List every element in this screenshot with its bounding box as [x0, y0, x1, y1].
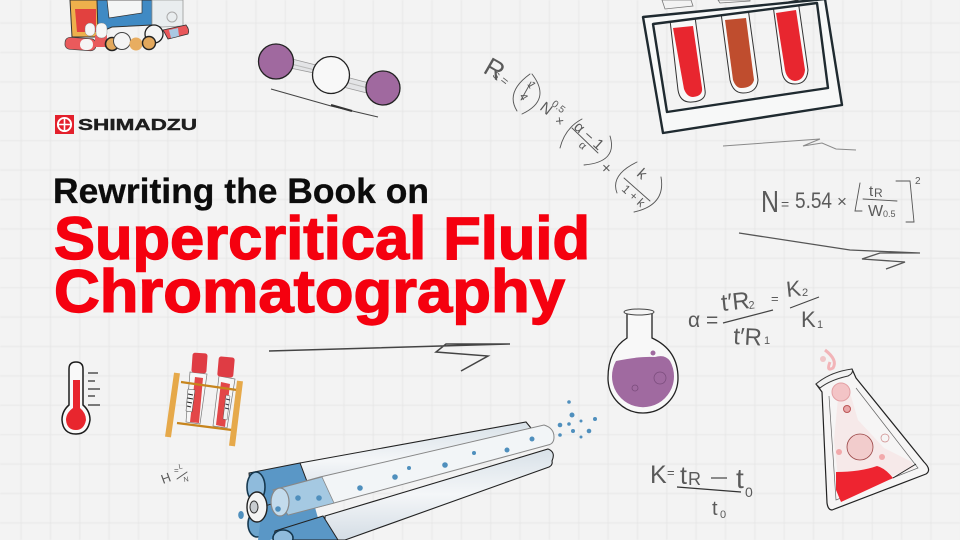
equation: H small: N	[183, 476, 189, 484]
illustration: erlenmeyer flask	[816, 350, 929, 510]
logo wordmark: SHIMADZU	[78, 117, 197, 134]
equation: N: 5.54	[795, 188, 832, 213]
liquid	[612, 356, 674, 407]
top tube	[247, 422, 531, 510]
equation: resolution Rs: k	[633, 165, 651, 183]
title line 2: Supercritical Fluid	[54, 205, 590, 272]
equation: N: W	[868, 203, 884, 220]
bottom tube	[273, 449, 553, 540]
equation: resolution Rs: 1	[524, 80, 538, 91]
illustration: blood sample tubes	[168, 353, 240, 446]
scribble: under rack	[723, 139, 856, 150]
tube 3	[773, 0, 808, 84]
lower-left tube end	[248, 511, 266, 537]
equation: alpha: K	[801, 307, 816, 332]
equation: k	[650, 461, 753, 521]
illustration: round bottom flask	[608, 309, 678, 413]
rack frame	[643, 0, 842, 133]
tube 1	[670, 17, 705, 102]
equation: resolution Rs: 0.5	[549, 99, 567, 116]
title line 1: Rewriting the Book on	[53, 172, 429, 211]
equation: H small: =	[174, 466, 179, 475]
equation: resolution Rs: 4	[516, 92, 530, 103]
illustration: thermometer	[62, 362, 100, 434]
equation: H small: H	[159, 470, 173, 487]
illustration: chromatography columns	[238, 400, 597, 540]
equation: alpha: 1	[764, 335, 770, 347]
rack frame	[168, 373, 240, 446]
tube 2	[721, 8, 758, 93]
ring end cap	[247, 492, 267, 522]
logo: Shimadzu	[55, 115, 197, 134]
equation: N: R	[874, 186, 883, 200]
equation: alpha: 1	[817, 319, 823, 331]
vapour	[825, 350, 834, 369]
liquid	[836, 466, 893, 502]
equation: N: 2	[915, 176, 921, 187]
equation: resolution Rs: α	[576, 139, 589, 153]
middle transparent tube	[271, 425, 554, 516]
tube right	[213, 356, 235, 428]
equation: resolution Rs: ×	[602, 160, 611, 177]
equation: alpha	[688, 276, 823, 351]
illustration: test tube rack	[643, 0, 842, 133]
equation: k: K	[650, 461, 667, 489]
particles	[238, 400, 597, 519]
equation: k: t	[712, 498, 718, 520]
scribble: centre	[269, 344, 510, 371]
equation: resolution Rs: ×	[552, 113, 567, 129]
equation: k: 0	[720, 509, 726, 521]
equation: alpha: =	[771, 291, 779, 306]
equation: resolution Rs: α − 1	[570, 118, 607, 154]
title	[53, 172, 590, 325]
equation: alpha: 2	[802, 287, 808, 299]
illustration: medicine boxes and pills	[65, 0, 189, 51]
equation: N: t	[869, 183, 874, 200]
logo mark	[55, 115, 74, 134]
equation: alpha: t′R	[733, 323, 763, 351]
equation: alpha: α =	[688, 309, 718, 332]
equation: H small	[159, 463, 189, 487]
equation: k: =	[667, 465, 675, 480]
equation: N: ×	[837, 192, 847, 211]
equation: resolution Rs: N	[537, 99, 556, 119]
equation: k: t	[736, 463, 744, 494]
tube tops above rack	[662, 0, 750, 9]
equation: k: t	[680, 462, 687, 490]
equation: alpha: K	[785, 276, 802, 302]
tube left	[186, 353, 208, 424]
equation: N	[761, 176, 921, 222]
equation: N: N	[761, 184, 779, 219]
illustration: molecule	[258, 44, 400, 117]
equation: alpha: t′R	[720, 287, 751, 317]
equation: resolution Rs: s =	[490, 67, 512, 88]
equation: N: 0.5	[883, 209, 896, 219]
equation: resolution Rs: 1 + k	[619, 182, 649, 211]
equation: alpha: 2	[748, 299, 755, 312]
equation: H small: L	[178, 463, 183, 471]
equation: N: =	[781, 196, 789, 212]
equation: k: R	[688, 469, 701, 489]
equation: resolution Rs: R	[479, 51, 510, 87]
equation: resolution Rs	[479, 51, 662, 212]
title line 3: Chromatography	[54, 258, 566, 325]
equation: k: 0	[745, 484, 753, 500]
scribble: below N equation	[739, 233, 920, 269]
